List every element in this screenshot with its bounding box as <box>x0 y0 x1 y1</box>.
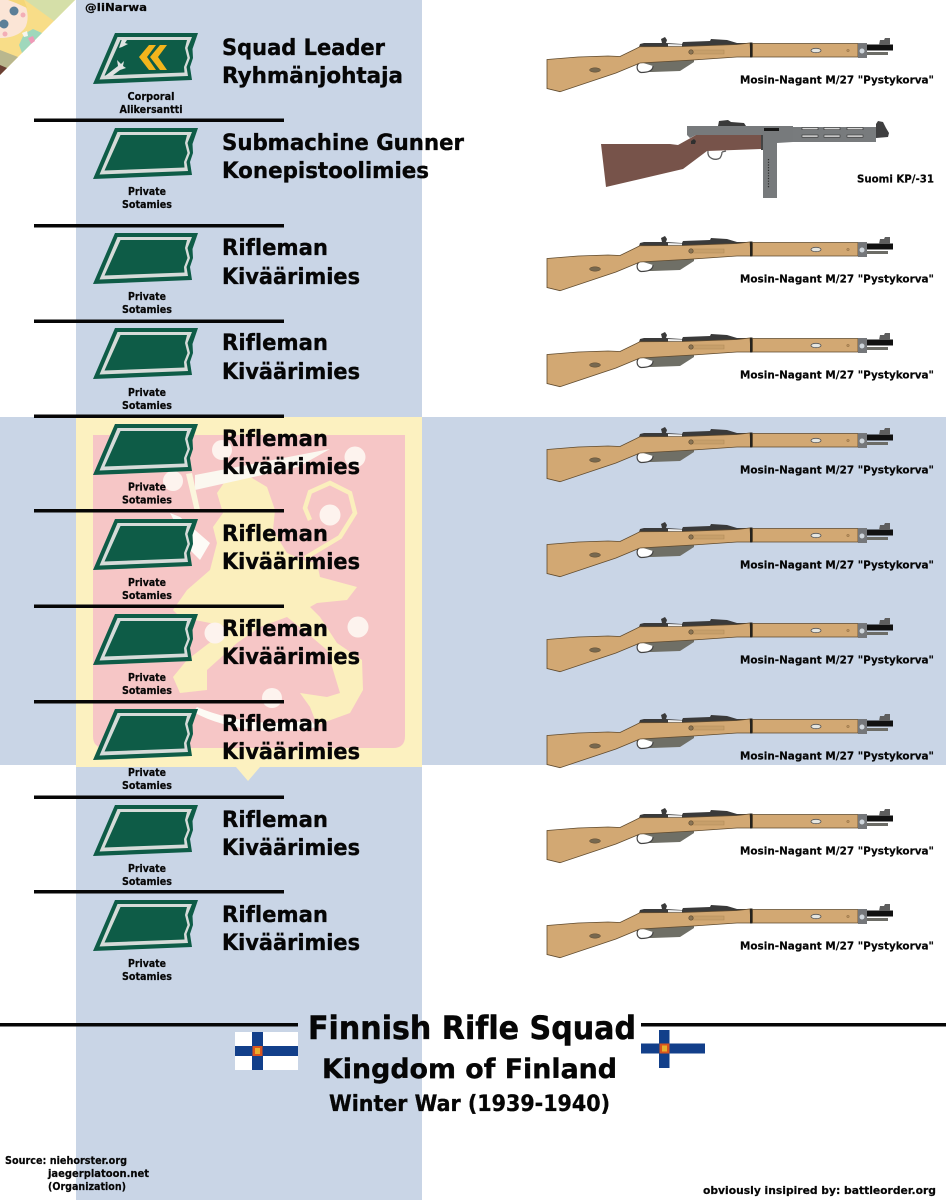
role label: Rifleman <box>222 331 328 356</box>
inspiration credit: obviously insipired by: battleorder.org <box>703 1184 936 1197</box>
squad row 1: squad leader <box>93 33 934 116</box>
squad row 3: rifleman: Mosin-Nagant M/27 "Pystykorva" <box>740 272 934 286</box>
insignia: private collar tab <box>93 128 198 179</box>
rifle: Mosin-Nagant M/27 <box>547 903 893 958</box>
squad row 2: submachine gunner: Suomi KP/-31 <box>857 172 934 186</box>
squad row 7: rifleman: Mosin-Nagant M/27 "Pystykorva" <box>740 654 934 666</box>
insignia: private collar tab <box>93 328 198 379</box>
role label: Rifleman <box>222 522 328 547</box>
squad row 8: rifleman <box>93 709 934 792</box>
rank label: Private <box>128 387 166 399</box>
squad row 6: rifleman <box>93 519 934 602</box>
squad row 4: rifleman: Mosin-Nagant M/27 "Pystykorva" <box>740 368 934 382</box>
rifle: Mosin-Nagant M/27 <box>547 713 893 768</box>
insignia: private collar tab <box>93 233 198 284</box>
rifle: Mosin-Nagant M/27 <box>547 522 893 577</box>
squad row 7: rifleman: Sotamies <box>122 685 172 697</box>
squad row 4: rifleman: Sotamies <box>122 400 172 412</box>
rank label: Private <box>128 672 166 684</box>
rifle: Mosin-Nagant M/27 <box>547 332 893 387</box>
squad row 8: rifleman: Kiväärimies <box>222 740 360 765</box>
squad row 5: rifleman <box>93 424 934 506</box>
role label: Rifleman <box>222 427 328 452</box>
roses <box>163 440 368 708</box>
squad row 1: squad leader: Mosin-Nagant M/27 "Pystykorva" <box>740 74 934 86</box>
squad row 10: rifleman: Sotamies <box>122 971 172 983</box>
insignia: private collar tab <box>93 519 198 570</box>
squad row 5: rifleman: Kiväärimies <box>222 455 360 480</box>
squad row 1: squad leader: Ryhmänjohtaja <box>222 64 403 89</box>
squad row 9: rifleman: Kiväärimies <box>222 836 360 861</box>
insignia: private collar tab <box>93 614 198 665</box>
squad row 8: rifleman: Mosin-Nagant M/27 "Pystykorva" <box>740 750 934 762</box>
rank label: Private <box>128 958 166 970</box>
credit: author handle: @IiNarwa <box>85 2 147 14</box>
role label: Squad Leader <box>222 36 385 61</box>
squad row 10: rifleman: Kiväärimies <box>222 931 360 956</box>
arm <box>170 513 210 560</box>
source credits <box>5 1155 149 1193</box>
squad row 2: submachine gunner <box>93 120 934 211</box>
squad row 2: submachine gunner: Konepistoolimies <box>222 159 429 184</box>
flag: Finland, right <box>641 1030 705 1068</box>
subtitle: country: Kingdom of Finland <box>322 1054 617 1085</box>
role label: Rifleman <box>222 712 328 737</box>
insignia: corporal collar tab <box>93 33 198 84</box>
squad row 3: rifleman <box>93 233 934 316</box>
insignia: private collar tab <box>93 900 198 951</box>
rank label: Corporal <box>128 91 174 103</box>
squad row 1: squad leader: Alikersantti <box>120 104 182 116</box>
source credits: Source: niehorster.org <box>5 1155 127 1167</box>
role label: Rifleman <box>222 808 328 833</box>
rifle: Mosin-Nagant M/27 <box>547 236 893 291</box>
squad row 2: submachine gunner: Sotamies <box>122 199 172 211</box>
squad row 9: rifleman: Sotamies <box>122 876 172 888</box>
submachine gun: Suomi KP/-31 <box>601 120 889 198</box>
squad row 10: rifleman: Mosin-Nagant M/27 "Pystykorva" <box>740 940 934 952</box>
source credits: jaegerplatoon.net <box>47 1168 149 1180</box>
squad row 5: rifleman: Mosin-Nagant M/27 "Pystykorva" <box>740 464 934 476</box>
source credits: (Organization) <box>48 1181 126 1193</box>
rifle: Mosin-Nagant M/27 <box>547 808 893 863</box>
insignia: private collar tab <box>93 709 198 760</box>
rifle: Mosin-Nagant M/27 <box>547 37 893 92</box>
insignia: white sprigs <box>105 39 128 76</box>
rank label: Private <box>128 577 166 589</box>
squad row 7: rifleman: Kiväärimies <box>222 645 360 670</box>
squad row 8: rifleman: Sotamies <box>122 780 172 792</box>
picture: cartoon character in top-left corner <box>0 0 75 75</box>
squad row 9: rifleman: Mosin-Nagant M/27 "Pystykorva" <box>740 844 934 858</box>
squad row 4: rifleman <box>93 328 934 412</box>
title block <box>308 1009 636 1117</box>
squad row 6: rifleman: Mosin-Nagant M/27 "Pystykorva" <box>740 558 934 572</box>
squad row 10: rifleman <box>93 900 934 983</box>
rank label: Private <box>128 186 166 198</box>
rank label: Private <box>128 291 166 303</box>
role label: Rifleman <box>222 903 328 928</box>
role label: Rifleman <box>222 236 328 261</box>
rank label: Private <box>128 767 166 779</box>
squad row 4: rifleman: Kiväärimies <box>222 360 360 385</box>
sabre <box>193 707 317 731</box>
main title: Finnish Rifle Squad <box>308 1009 636 1047</box>
lion tail <box>305 483 355 558</box>
lion <box>173 475 363 725</box>
shield field <box>76 417 422 781</box>
insignia: private collar tab <box>93 805 198 856</box>
squad row 3: rifleman: Kiväärimies <box>222 265 360 290</box>
insignia: private collar tab <box>93 424 198 475</box>
insignia: yellow chevrons <box>139 45 167 70</box>
squad row 6: rifleman: Sotamies <box>122 590 172 602</box>
rank label: Private <box>128 863 166 875</box>
subtitle: conflict: Winter War (1939-1940) <box>329 1092 610 1117</box>
emblem: coat of arms of Finland <box>76 417 422 781</box>
squad row 6: rifleman: Kiväärimies <box>222 550 360 575</box>
squad row 3: rifleman: Sotamies <box>122 304 172 316</box>
squad row 9: rifleman <box>93 805 934 888</box>
role label: Rifleman <box>222 617 328 642</box>
squad row 7: rifleman <box>93 614 934 697</box>
rank label: Private <box>128 482 166 494</box>
sword <box>195 449 330 490</box>
rifle: Mosin-Nagant M/27 <box>547 427 893 482</box>
rifle: Mosin-Nagant M/27 <box>547 617 893 672</box>
role label: Submachine Gunner <box>222 131 464 156</box>
flag: Finland, left <box>235 1032 298 1070</box>
squad row 5: rifleman: Sotamies <box>122 494 172 506</box>
